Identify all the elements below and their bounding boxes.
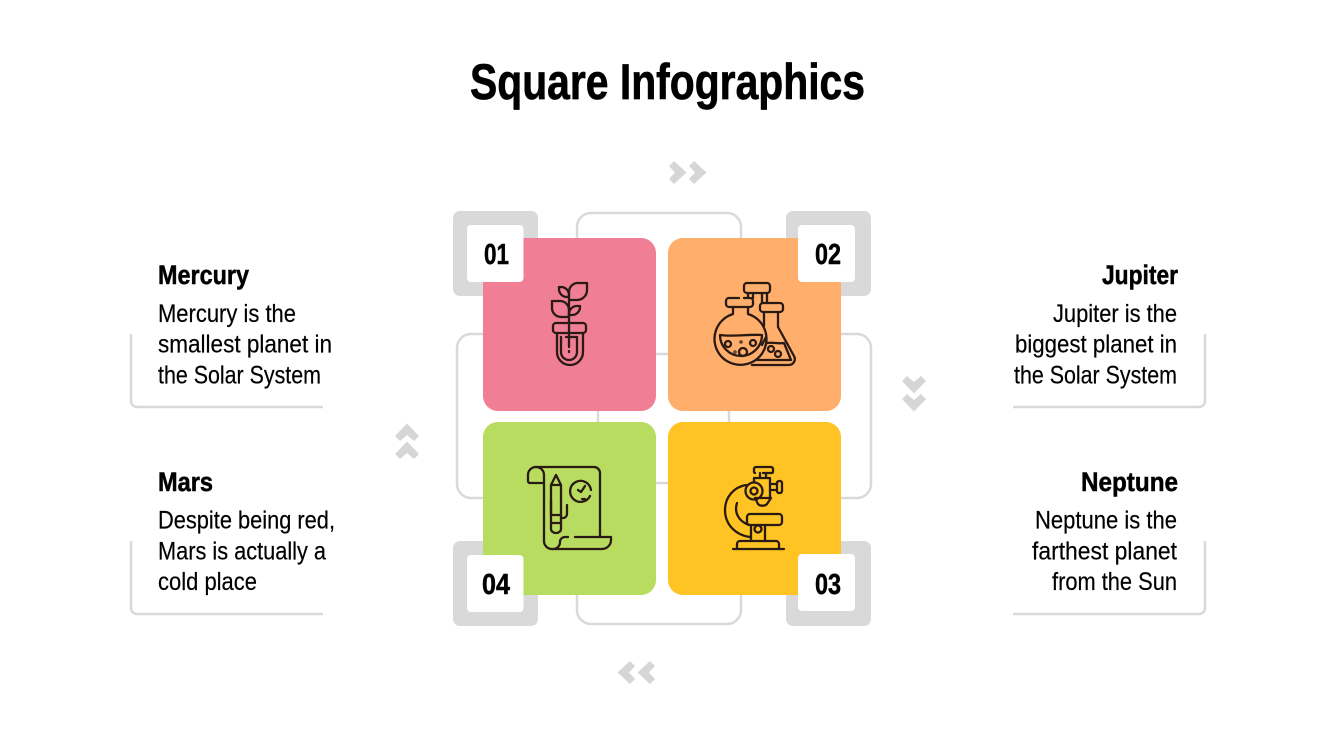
text: Neptune description: from the Sun bbox=[1052, 568, 1177, 596]
arrow: top chevrons bbox=[669, 161, 706, 184]
panel: Jupiter bbox=[1013, 260, 1205, 407]
icon: scroll with pen bbox=[528, 467, 611, 549]
icon: microscope bbox=[725, 467, 784, 549]
grey square 04 bbox=[453, 541, 538, 626]
text: Jupiter description bbox=[1014, 300, 1177, 390]
text: Mercury description: smallest planet in bbox=[158, 330, 332, 358]
text: Neptune description: Neptune is the bbox=[1035, 506, 1177, 534]
badge 01 bbox=[467, 225, 524, 282]
badge 04 bbox=[467, 555, 524, 612]
heading: Neptune: Neptune bbox=[1081, 467, 1178, 497]
heading: Mercury: Mercury bbox=[158, 260, 249, 290]
arrow: left chevrons bbox=[395, 424, 419, 459]
badge 02: 02 bbox=[815, 239, 841, 271]
panel: pink card bbox=[483, 238, 656, 411]
text: Jupiter description: the Solar System bbox=[1014, 362, 1177, 390]
title: Square Infographics bbox=[470, 54, 865, 110]
text: Mercury description: Mercury is the bbox=[158, 300, 296, 328]
text: Neptune description: farthest planet bbox=[1032, 538, 1177, 566]
text: Mars description: Despite being red, bbox=[158, 506, 335, 534]
panel: Neptune bbox=[1013, 467, 1205, 614]
icon: plant in test tube bbox=[552, 283, 587, 365]
heading: Mars: Mars bbox=[158, 467, 213, 497]
text: Mercury description bbox=[158, 300, 332, 390]
connector loops bbox=[457, 213, 871, 624]
panel: green card bbox=[483, 422, 656, 595]
grey square 01 bbox=[453, 211, 538, 296]
badge 01: 01 bbox=[484, 239, 509, 271]
panel: orange card bbox=[668, 238, 841, 411]
badge 03: 03 bbox=[815, 569, 841, 601]
grey square 02 bbox=[786, 211, 871, 296]
text: Jupiter description: Jupiter is the bbox=[1053, 300, 1177, 328]
icon: lab flasks bbox=[714, 283, 795, 365]
grey square 03 bbox=[786, 541, 871, 626]
panel: Mercury bbox=[131, 260, 332, 407]
badge 03 bbox=[798, 554, 855, 611]
text: Mars description: Mars is actually a bbox=[158, 538, 326, 566]
text: Jupiter description: biggest planet in bbox=[1015, 330, 1177, 358]
arrow: right chevrons bbox=[902, 376, 926, 412]
text: Mars description: cold place bbox=[158, 568, 257, 596]
text: Mars description bbox=[158, 506, 335, 596]
arrow: bottom chevrons bbox=[618, 661, 655, 684]
text: Mercury description: the Solar System bbox=[158, 362, 321, 390]
badge 02 bbox=[798, 225, 855, 282]
panel: yellow card bbox=[668, 422, 841, 595]
badge 04: 04 bbox=[482, 569, 510, 601]
panel: Mars bbox=[131, 467, 335, 614]
heading: Jupiter: Jupiter bbox=[1102, 260, 1178, 290]
text: Neptune description bbox=[1032, 506, 1177, 596]
